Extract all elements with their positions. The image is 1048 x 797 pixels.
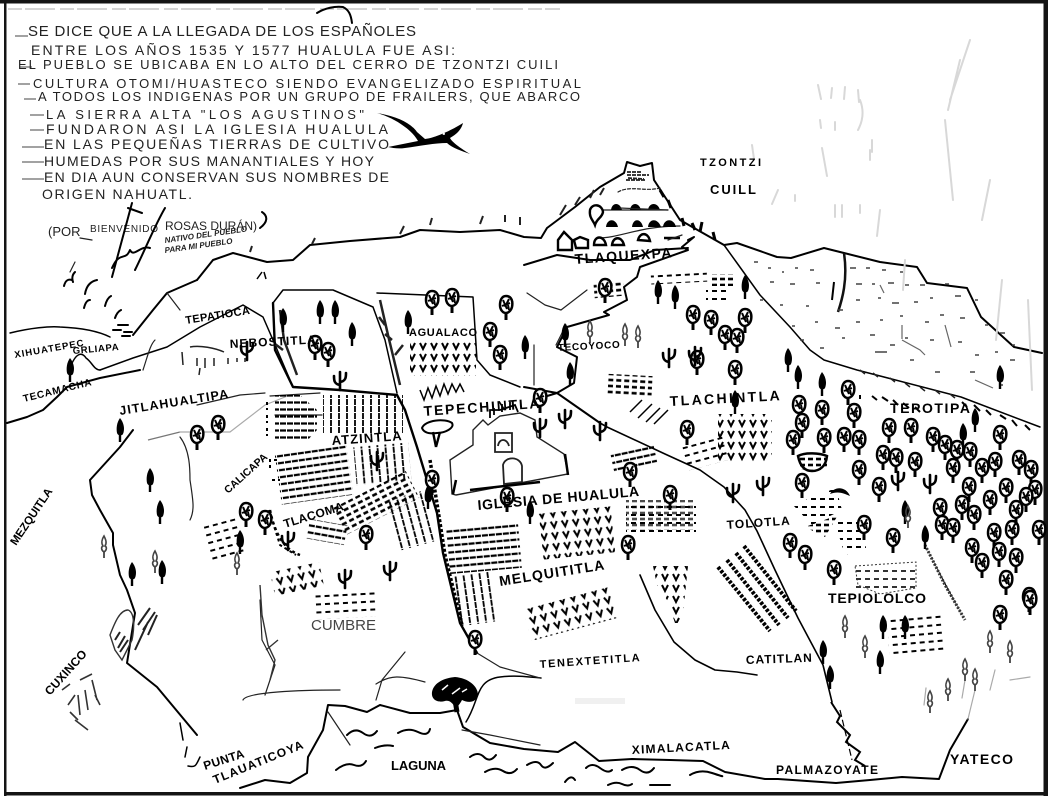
place labels: TOLOTLA — [726, 514, 790, 532]
place labels: TENEXTETITLA — [539, 652, 640, 671]
place labels: MEZQUITLA — [9, 486, 55, 548]
place labels: XIHUATEPEC — [14, 338, 85, 361]
lagoon waves — [336, 729, 722, 786]
place labels: TLAQUEXPA — [574, 244, 672, 267]
left valley lines — [7, 293, 425, 767]
text block: historical note: EL PUEBLO SE UBICABA EN LO ALTO DEL CERRO DE TZONTZI CUILI — [18, 57, 558, 72]
small tree cluster, Jitlahualtipa — [182, 346, 245, 375]
place labels: CUXINCO — [42, 647, 90, 698]
place labels: CATITLAN — [746, 651, 812, 667]
signature: NATIVO DEL PUEBLO — [164, 224, 249, 245]
place labels: IGLESIA DE HUALULA — [477, 483, 640, 513]
central boundary lines — [197, 290, 587, 678]
signature: (POR — [48, 224, 80, 239]
text block: historical note: LA SIERRA ALTA "LOS AGUSTINOS" — [46, 107, 364, 122]
place labels: TZONTZI — [700, 157, 761, 169]
text block: historical note — [8, 7, 581, 202]
text block: historical note: EN LAS PEQUEÑAS TIERRAS DE CULTIVO — [44, 136, 389, 152]
text block: historical note: FUNDARON ASI LA IGLESIA HUALULA — [46, 121, 389, 137]
place labels: TEPATIOCA — [185, 305, 251, 327]
text block: historical note: EN DIA AUN CONSERVAN SUS NOMBRES DE — [44, 169, 389, 185]
hill with terraces and houses — [524, 172, 694, 423]
place labels: CUMBRE — [311, 617, 376, 634]
faint pencil marks on upper right — [575, 40, 1032, 704]
text block: historical note: HUMEDAS POR SUS MANANTIALES Y HOY — [44, 153, 375, 169]
place labels: TECAMACHA — [22, 377, 93, 405]
Xihuatepec slope marks — [64, 272, 266, 336]
text block: historical note: A TODOS LOS INDIGENAS POR UN GRUPO DE FRAILERS, QUE ABARCO — [38, 89, 580, 104]
fields — [201, 273, 944, 659]
place labels: CUILL — [710, 182, 756, 197]
icon: church, Iglesia de Hualula — [450, 402, 568, 495]
Cuxinco grove and gully — [62, 585, 278, 730]
place labels: TECOYOCO — [558, 340, 620, 354]
place labels: JITLAHUALTIPA — [118, 387, 229, 418]
place labels: XIMALACATLA — [631, 738, 730, 757]
place labels: NEBOSTITLA — [229, 332, 316, 351]
place labels: TLACHINTLA — [669, 387, 780, 409]
text block: historical note: ENTRE LOS AÑOS 1535 Y 1577 HUALULA FUE ASI: — [31, 42, 455, 58]
place labels: PUNTA — [202, 746, 246, 773]
place labels: MELQUITITLA — [498, 557, 605, 589]
place labels: TEPECHINTLA — [423, 395, 540, 419]
right hill lines — [600, 245, 1040, 766]
large tree on the shore — [432, 677, 478, 712]
trees and plants — [67, 275, 1045, 713]
place labels: CALICAPA — [222, 451, 270, 496]
signature: BIENVENIDO — [90, 224, 158, 235]
signature: PARA MI PUEBLO — [164, 236, 234, 255]
place labels: TEPIOLOLCO — [828, 590, 926, 606]
place labels: LAGUNA — [391, 758, 447, 773]
place labels — [9, 157, 1013, 787]
signature: ROSAS DURÁN) — [165, 218, 257, 233]
place labels: YATECO — [950, 751, 1013, 767]
place labels: PALMAZOYATE — [776, 763, 878, 777]
place labels: TLACOMA — [282, 499, 345, 531]
lake shore — [240, 676, 968, 788]
place labels: TEPOTIPA — [890, 400, 970, 416]
icon: bird — [377, 113, 470, 154]
place labels: AGUALACO — [409, 327, 477, 339]
mountain ridge line — [133, 162, 1042, 353]
text block: historical note: SE DICE QUE A LA LLEGADA DE LOS ESPAÑOLES — [28, 23, 416, 40]
place labels: GRLIAPA — [72, 342, 119, 357]
place labels: TLAUATICOYA — [211, 738, 305, 787]
Tepeyac tree near church — [422, 420, 453, 447]
place labels: ATZINTLA — [331, 428, 403, 448]
signature — [48, 203, 266, 277]
text block: historical note: ORIGEN NAHUATL. — [42, 186, 192, 202]
text block: historical note: CULTURA OTOMI/HUASTECO SIENDO EVANGELIZADO ESPIRITUAL — [33, 76, 581, 91]
